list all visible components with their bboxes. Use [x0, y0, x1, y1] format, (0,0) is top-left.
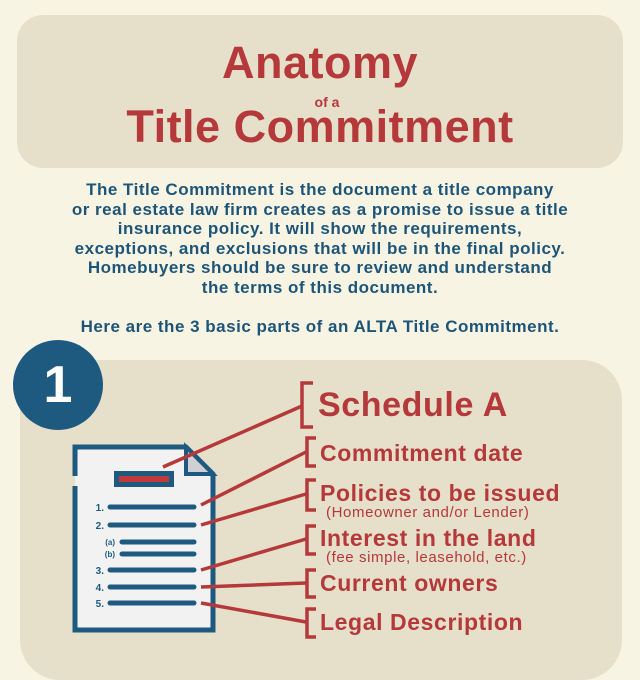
- icon: document: 1.: [96, 503, 104, 514]
- intro text: [72, 180, 568, 336]
- icon: document: (b): [105, 550, 115, 559]
- title panel: [17, 15, 623, 168]
- labels: schedule A items: (fee simple, leasehold, etc.): [326, 549, 527, 566]
- labels: schedule A items: Schedule A: [318, 386, 508, 424]
- icon: document: 2.: [96, 521, 104, 532]
- labels: schedule A items: Policies to be issued: [320, 480, 560, 506]
- connectors and brackets: [163, 383, 316, 637]
- title: Anatomy: [222, 37, 418, 88]
- icon: document: 5.: [96, 599, 104, 610]
- number badge 1: 1: [44, 356, 72, 414]
- intro text: Homebuyers should be sure to review and understand: [88, 258, 552, 277]
- intro text: The Title Commitment is the document a title company: [86, 180, 554, 199]
- number badge 1: [13, 340, 103, 430]
- icon: document: 4.: [96, 583, 104, 594]
- icon: document: [75, 447, 213, 630]
- intro text: Here are the 3 basic parts of an ALTA Title Commitment.: [81, 316, 559, 336]
- intro text: insurance policy. It will show the requirements,: [118, 219, 522, 238]
- intro text: or real estate law firm creates as a promise to issue a title: [72, 200, 568, 218]
- icon: document: (a): [105, 538, 115, 547]
- title: [126, 37, 514, 152]
- intro text: the terms of this document.: [202, 278, 438, 296]
- labels: schedule A items: [318, 386, 560, 635]
- labels: schedule A items: Interest in the land: [320, 525, 536, 551]
- labels: schedule A items: Current owners: [320, 570, 498, 596]
- title: Title Commitment: [126, 101, 514, 152]
- intro text: exceptions, and exclusions that will be in the final policy.: [75, 238, 565, 258]
- title: of a: [315, 94, 339, 110]
- panel: schedule A: [20, 360, 622, 680]
- labels: schedule A items: Commitment date: [320, 440, 523, 466]
- labels: schedule A items: Legal Description: [320, 609, 523, 635]
- icon: document: 3.: [96, 566, 104, 577]
- labels: schedule A items: (Homeowner and/or Lender): [326, 504, 529, 521]
